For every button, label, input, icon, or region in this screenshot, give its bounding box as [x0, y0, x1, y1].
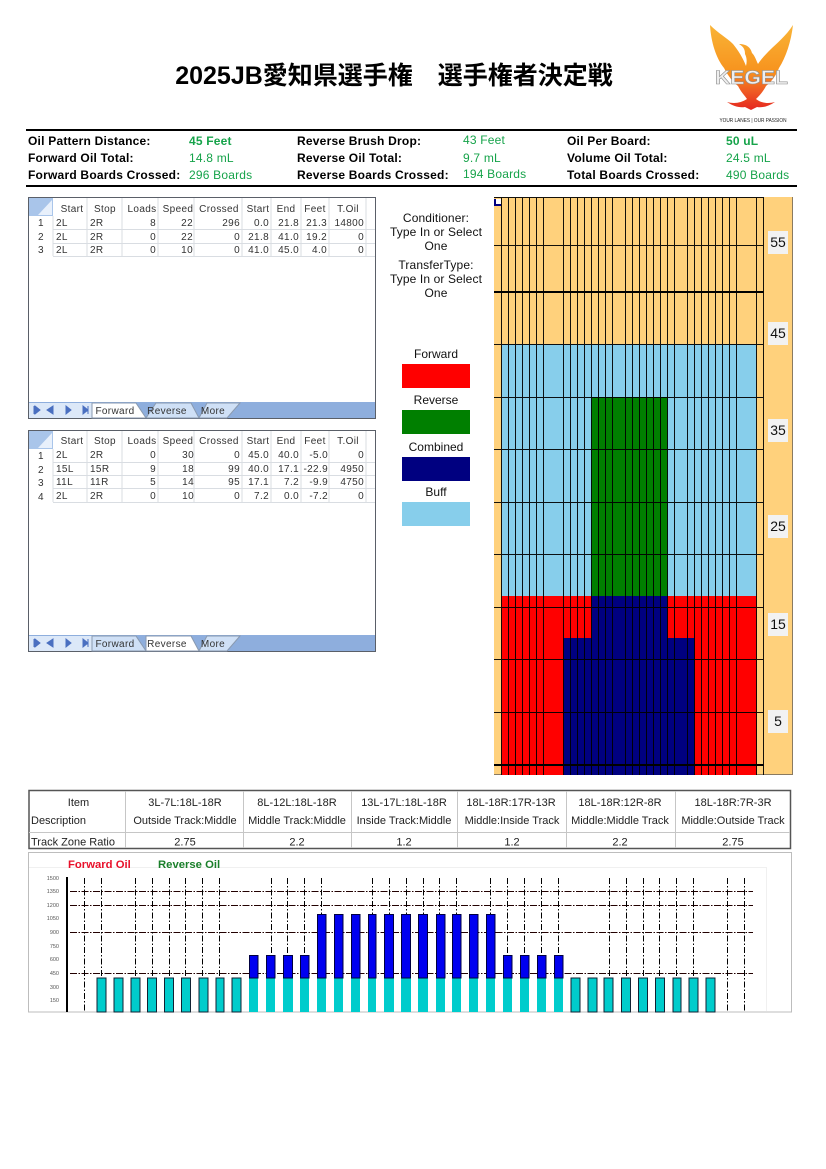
table header: Speed [163, 436, 193, 447]
table rows: 99 [228, 464, 240, 475]
track zone ratio table: Outside Track:Middle [133, 815, 237, 827]
stat labels and values: 194 Boards [463, 167, 526, 181]
table rows: 2R [90, 218, 103, 229]
table rows: -5.0 [309, 450, 328, 461]
stat labels and values: Oil Pattern Distance: [28, 134, 151, 148]
distance label 5 [768, 710, 788, 733]
transfer type text [390, 258, 482, 300]
table rows: 2R [90, 491, 103, 502]
table header: Start [247, 204, 269, 215]
stats panel [26, 129, 797, 187]
table rows: 22 [181, 232, 193, 243]
table rows: 41.0 [278, 232, 299, 243]
lane oil pattern graph [494, 197, 793, 775]
distance label 25: 25 [770, 518, 786, 534]
table rows: 0 [358, 232, 364, 243]
table rows: 8 [150, 218, 156, 229]
table rows: 21.8 [248, 232, 269, 243]
table rows: 0 [150, 491, 156, 502]
distance label 15: 15 [770, 616, 786, 632]
track zone ratio table: 2.2 [612, 836, 628, 848]
table rows: 7.2 [254, 491, 269, 502]
table header: End [277, 436, 295, 447]
track zone ratio table: 1.2 [504, 836, 520, 848]
table rows: 40.0 [248, 464, 269, 475]
track zone ratio table: Inside Track:Middle [357, 815, 451, 827]
table header: End [277, 204, 295, 215]
panel: reverse oil spreadsheet [28, 430, 376, 652]
stat labels and values: 9.7 mL [463, 151, 501, 165]
table rows: 10 [182, 491, 194, 502]
track zone ratio table: 8L-12L:18L-18R [257, 797, 337, 809]
distance label 55: 55 [770, 234, 786, 250]
track zone ratio table: 2.2 [289, 836, 305, 848]
icon: Kegel phoenix logo: KEGEL [715, 68, 788, 89]
transfer type text: TransferType: [398, 258, 474, 272]
conditioner text: One [424, 239, 448, 253]
track zone ratio table: Middle:Middle Track [571, 815, 669, 827]
table header: Start [247, 436, 269, 447]
y axis: 1050 [47, 916, 59, 922]
stat labels and values: Forward Oil Total: [28, 151, 134, 165]
y axis: 600 [50, 957, 59, 963]
table header: Start [61, 436, 83, 447]
stat labels and values: Reverse Oil Total: [297, 151, 402, 165]
table rows: -22.9 [303, 464, 328, 475]
forward oil zone [502, 596, 756, 775]
table rows: 0 [358, 245, 364, 256]
table rows: 3 [38, 478, 44, 489]
table rows: 0 [234, 245, 240, 256]
stat labels and values: 296 Boards [189, 168, 252, 182]
y axis: 1200 [47, 903, 59, 909]
stat labels and values: 490 Boards [726, 168, 789, 182]
track zone ratio table: 2.75 [174, 836, 196, 848]
distance label 35: 35 [770, 422, 786, 438]
y axis: 1350 [47, 889, 59, 895]
track zone ratio table: Middle:Inside Track [465, 815, 560, 827]
track zone ratio table [28, 790, 792, 850]
conditioner text: Type In or Select [390, 225, 482, 239]
stat labels and values: Volume Oil Total: [567, 151, 668, 165]
combined oil zone [564, 596, 694, 775]
table rows: 14 [182, 477, 194, 488]
table header: Loads [128, 436, 156, 447]
track zone ratio table: Item [68, 797, 89, 809]
chart legend: Forward Oil [68, 859, 131, 871]
table rows: 2R [90, 232, 103, 243]
table rows: 0 [234, 491, 240, 502]
distance label 55 [768, 231, 788, 254]
board grid [494, 197, 764, 775]
track zone ratio table: Middle Track:Middle [248, 815, 346, 827]
stat labels and values: Reverse Brush Drop: [297, 134, 421, 148]
legend swatch: buff [402, 502, 470, 526]
table rows: 2 [38, 465, 44, 476]
table header: Crossed [199, 204, 239, 215]
table rows: 7.2 [284, 477, 299, 488]
legend swatch: combined [402, 457, 470, 481]
distance label 45 [768, 322, 788, 345]
table header: Loads [128, 204, 156, 215]
distance label 25 [768, 515, 788, 538]
table rows: 2L [56, 218, 68, 229]
table rows: -9.9 [309, 477, 328, 488]
reverse oil zone [592, 397, 668, 596]
y axis: 450 [50, 971, 59, 977]
legend: Buff [425, 485, 447, 499]
table rows: 22 [181, 218, 193, 229]
legend: Combined [409, 440, 463, 454]
conditioner text: Conditioner: [403, 211, 469, 225]
table rows: 0.0 [284, 491, 299, 502]
track zone ratio table: Middle:Outside Track [681, 815, 785, 827]
table rows: 17.1 [278, 464, 299, 475]
table rows: 21.3 [306, 218, 327, 229]
y axis: 150 [50, 998, 59, 1004]
forward oil bars [97, 978, 715, 1012]
table rows: 1 [38, 218, 44, 229]
chart legend: Reverse Oil [158, 859, 220, 871]
track zone ratio table: 2.75 [722, 836, 744, 848]
title: 2025JB愛知県選手権 選手権者決定戦 [175, 62, 613, 90]
track zone ratio table: 18L-18R:17R-13R [466, 797, 556, 809]
table rows: 4.0 [312, 245, 327, 256]
stat labels and values: 43 Feet [463, 133, 505, 147]
sheet tabs: Forward [95, 639, 135, 650]
legend swatch: reverse [402, 410, 470, 434]
panel: forward oil spreadsheet [28, 197, 376, 419]
chart legend [68, 859, 220, 871]
table rows: 15R [90, 464, 109, 475]
conditioner text [390, 211, 482, 253]
stat labels and values [28, 133, 789, 182]
table rows: 17.1 [248, 477, 269, 488]
table header: T.Oil [337, 436, 359, 447]
table rows: 0 [150, 450, 156, 461]
table rows [38, 218, 364, 256]
table header: Speed [163, 204, 193, 215]
y axis: 900 [50, 930, 59, 936]
sheet tabs: Reverse [147, 639, 187, 650]
sheet tabs: Reverse [147, 406, 187, 417]
table rows: 5 [150, 477, 156, 488]
table header: Start [61, 204, 83, 215]
table rows: 0 [150, 245, 156, 256]
table rows: 0 [234, 450, 240, 461]
table header: Crossed [199, 436, 239, 447]
distance label 15 [768, 613, 788, 636]
table rows: 21.8 [278, 218, 299, 229]
stat labels and values: Total Boards Crossed: [567, 168, 699, 182]
buff zone [502, 344, 756, 596]
legend swatch: forward [402, 364, 470, 388]
grid lines [70, 892, 753, 974]
icon: Kegel phoenix logo [710, 25, 793, 124]
stat labels and values: 24.5 mL [726, 151, 771, 165]
legend: Reverse [414, 393, 458, 407]
reverse oil bars [250, 914, 563, 978]
table header: Stop [94, 204, 116, 215]
sheet tabs [29, 635, 375, 651]
track zone ratio table: 3L-7L:18L-18R [148, 797, 222, 809]
table rows: 45.0 [278, 245, 299, 256]
stat labels and values: 14.8 mL [189, 151, 234, 165]
transfer type text: Type In or Select [390, 272, 482, 286]
stat labels and values: 45 Feet [189, 134, 232, 148]
stat labels and values: Reverse Boards Crossed: [297, 168, 449, 182]
sheet tabs [29, 402, 375, 418]
table header [61, 436, 359, 447]
table rows: 0 [358, 450, 364, 461]
table rows: 19.2 [306, 232, 327, 243]
table rows: 1 [38, 451, 44, 462]
track zone ratio table: 18L-18R:12R-8R [578, 797, 662, 809]
table rows: 3 [38, 245, 44, 256]
table header: T.Oil [337, 204, 359, 215]
table rows: 2L [56, 450, 68, 461]
table rows: 4750 [340, 477, 364, 488]
table rows: 11R [90, 477, 109, 488]
track zone ratio table: 18L-18R:7R-3R [694, 797, 772, 809]
table rows: 11L [56, 477, 73, 488]
table header [61, 204, 359, 215]
table rows: 2L [56, 491, 68, 502]
sheet tabs: Forward [95, 406, 135, 417]
track zone ratio table: Track Zone Ratio [31, 836, 115, 848]
sheet tabs: More [201, 639, 225, 650]
y axis [47, 876, 67, 1012]
y axis: 1500 [47, 876, 59, 882]
table rows: 45.0 [248, 450, 269, 461]
table header: Feet [304, 436, 326, 447]
table rows: 41.0 [248, 245, 269, 256]
table rows: 0.0 [254, 218, 269, 229]
table rows: 95 [228, 477, 240, 488]
oil distribution bar chart [28, 852, 792, 1012]
table rows: 2R [90, 245, 103, 256]
distance label 45: 45 [770, 325, 786, 341]
table rows: 40.0 [278, 450, 299, 461]
table rows: 296 [222, 218, 240, 229]
table rows: 14800 [334, 218, 364, 229]
table rows: -7.2 [309, 491, 328, 502]
table rows: 15L [56, 464, 74, 475]
table rows [38, 450, 364, 503]
stat labels and values: Forward Boards Crossed: [28, 168, 180, 182]
track zone ratio table: Description [31, 815, 86, 827]
table rows: 4950 [340, 464, 364, 475]
table header: Feet [304, 204, 326, 215]
table rows: 2L [56, 245, 68, 256]
table rows: 2 [38, 232, 44, 243]
y axis: 750 [50, 944, 59, 950]
table rows: 18 [182, 464, 194, 475]
distance label 35 [768, 419, 788, 442]
sheet tabs: More [201, 406, 225, 417]
transfer type text: One [424, 286, 448, 300]
stat labels and values: 50 uL [726, 134, 758, 148]
table rows: 30 [182, 450, 194, 461]
track zone ratio table: 13L-17L:18L-18R [361, 797, 447, 809]
table rows: 4 [38, 492, 44, 503]
track zone ratio table: 1.2 [396, 836, 412, 848]
table rows: 2L [56, 232, 68, 243]
stat labels and values: Oil Per Board: [567, 134, 651, 148]
table rows: 2R [90, 450, 103, 461]
distance label 5: 5 [774, 713, 782, 729]
icon: Kegel phoenix logo: YOUR LANES | OUR PASSION [720, 118, 787, 124]
table header: Stop [94, 436, 116, 447]
table rows: 0 [150, 232, 156, 243]
table rows: 0 [234, 232, 240, 243]
legend [402, 347, 470, 526]
table rows: 10 [181, 245, 193, 256]
table rows: 0 [358, 491, 364, 502]
legend: Forward [414, 347, 458, 361]
y axis: 300 [50, 985, 59, 991]
table rows: 9 [150, 464, 156, 475]
